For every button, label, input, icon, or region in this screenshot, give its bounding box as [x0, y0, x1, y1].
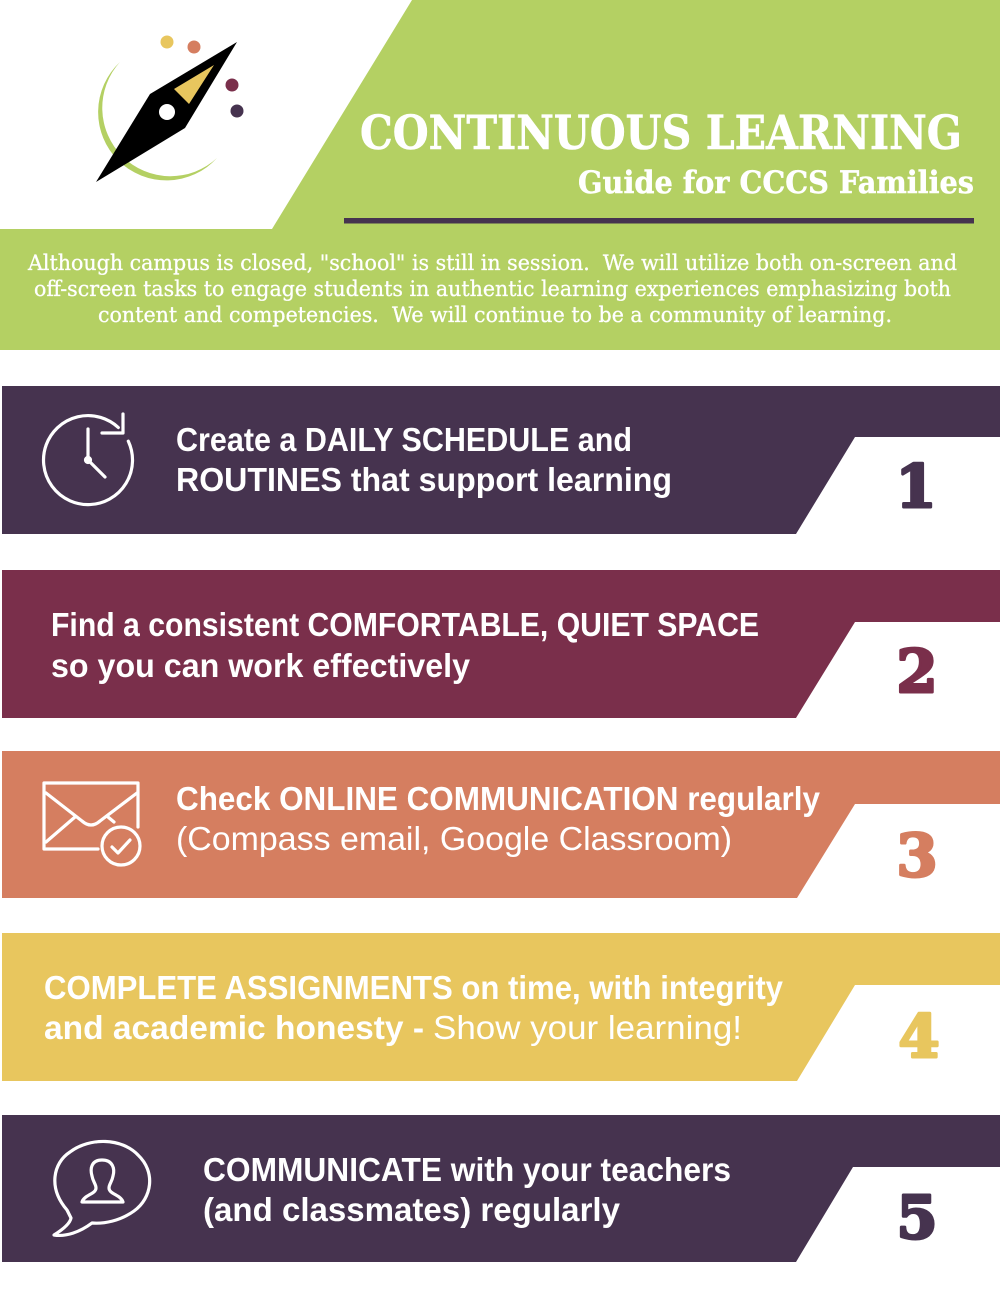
panel: step 4	[2, 933, 1000, 1081]
subtitle: Guide for CCCS Families	[578, 165, 974, 201]
step 1 text	[176, 421, 672, 498]
step 3 text	[176, 780, 821, 857]
intro paragraph: content and competencies. We will continue to be a community of learning.	[98, 303, 892, 327]
icon: speech bubble with person	[54, 1141, 150, 1235]
logo: compass	[96, 36, 244, 182]
header rule	[344, 218, 974, 224]
step 2 text: Find a consistent COMFORTABLE, QUIET SPACE	[51, 606, 759, 643]
number 2: 2	[896, 637, 938, 706]
step 4 text: Show your learning!	[433, 1009, 742, 1046]
step 4 text	[44, 969, 784, 1046]
step 5 text: (and classmates) regularly	[203, 1191, 621, 1228]
step 2 text: so you can work effectively	[51, 647, 471, 684]
intro paragraph	[27, 251, 957, 327]
panel: step 3	[2, 751, 1000, 898]
step 5 text	[203, 1151, 731, 1228]
step 4 text: and academic honesty -	[44, 1009, 424, 1046]
intro paragraph: Although campus is closed, "school" is still in session. We will utilize both on-screen and	[27, 251, 957, 275]
number 1: 1	[895, 452, 937, 521]
panel: step 1	[2, 386, 1000, 534]
icon: clock	[44, 414, 133, 505]
step 5 text: COMMUNICATE with your teachers	[203, 1151, 731, 1188]
step 1 text: Create a DAILY SCHEDULE and	[176, 421, 632, 458]
panel: step 2	[2, 570, 1000, 718]
step 1 text: ROUTINES that support learning	[176, 461, 672, 498]
number 4: 4	[898, 1002, 940, 1071]
number 3: 3	[896, 821, 938, 890]
number 5: 5	[896, 1183, 938, 1252]
step 4 text: COMPLETE ASSIGNMENTS on time, with integrity	[44, 969, 784, 1006]
step 2 text	[51, 606, 759, 684]
step 3 text: Check ONLINE COMMUNICATION regularly	[176, 780, 821, 817]
step 3 text: (Compass email, Google Classroom)	[176, 820, 732, 857]
header green panel	[0, 0, 1000, 350]
intro paragraph: off-screen tasks to engage students in authentic learning experiences emphasizing both	[34, 277, 951, 301]
icon: envelope with check	[44, 783, 140, 865]
panel: step 5	[2, 1115, 1000, 1262]
